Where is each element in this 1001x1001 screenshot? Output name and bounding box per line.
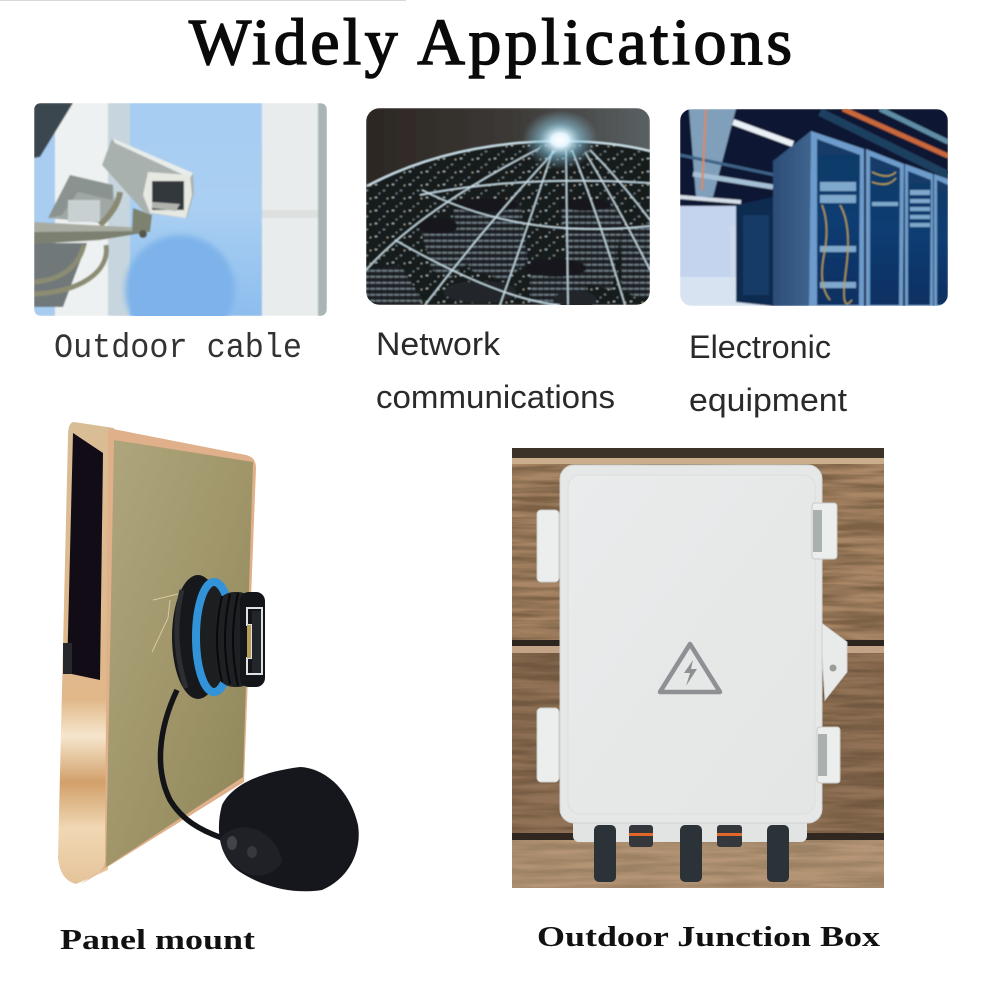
blue seal ring [196,582,232,692]
photo: panel mount connector [58,422,359,891]
mounting ear [820,622,847,700]
caption: electronic equipment [689,329,847,418]
caption: panel mount: Panel mount [60,925,256,956]
dust cap [219,767,359,891]
stray wires [152,594,178,652]
right latches [812,503,840,783]
threaded body [216,592,256,687]
caption: electronic equipment: Electronic [689,329,831,365]
photo: outdoor junction box [512,448,884,888]
RJ45 port [247,608,262,674]
photo: server room [680,109,948,306]
long cable glands [594,825,789,882]
caption: electronic equipment: equipment [689,382,847,418]
caption: network communications [376,326,615,415]
caption: outdoor cable: Outdoor cable [54,330,302,368]
left hinges [537,510,559,782]
top rule [0,0,406,1]
lower body [573,823,807,842]
tether [160,690,222,838]
photo: outdoor security cameras [34,103,327,316]
caption: network communications: Network [376,326,501,362]
box body [560,465,822,823]
box lid [568,475,815,814]
side edge of panel [58,422,114,884]
caption: outdoor junction box: Outdoor Junction Box [537,921,881,953]
photo: network globe [366,108,650,309]
caption: network communications: communications [376,379,615,415]
warning triangle icon [660,644,720,692]
wood planks [512,448,884,888]
city towers [366,198,650,309]
connector flange [172,575,224,699]
short orange-banded glands [629,825,742,847]
title: Widely Applications [189,6,792,79]
